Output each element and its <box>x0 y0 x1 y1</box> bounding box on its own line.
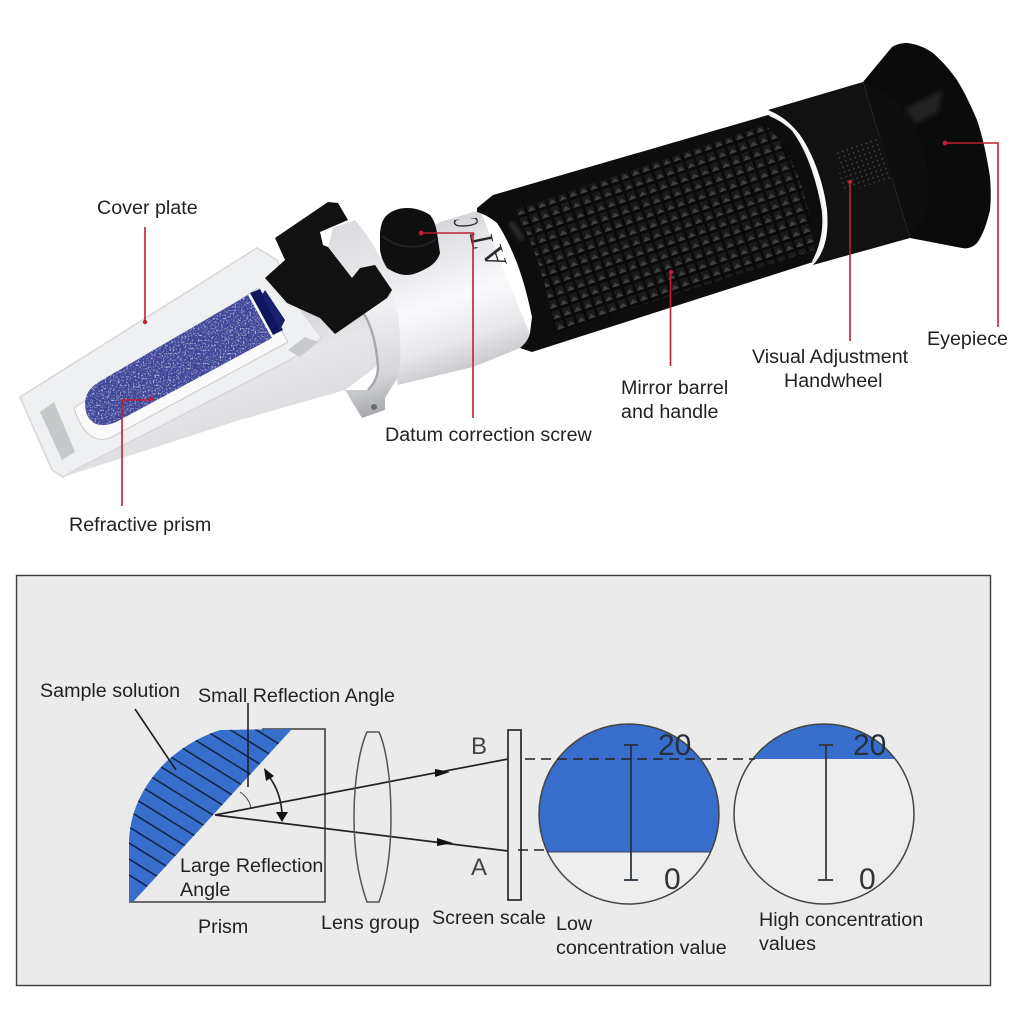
black clamp <box>265 202 392 334</box>
lens group <box>354 732 391 902</box>
light rays <box>215 759 508 851</box>
label: eyepiece: Eyepiece <box>927 328 1008 350</box>
adjusting knob <box>380 208 440 275</box>
silver collar ring <box>328 220 400 418</box>
eyepiece <box>863 43 991 248</box>
eyepiece highlight <box>905 90 943 124</box>
textured rubber grip <box>477 115 824 352</box>
large reflection angle label <box>180 855 323 901</box>
high concentration label <box>759 909 923 955</box>
high concentration label: High concentration <box>759 909 923 931</box>
small reflection leader line <box>247 703 249 787</box>
panel: working principle diagram <box>16 576 990 999</box>
low concentration label: Low <box>556 913 593 935</box>
cover glass details <box>288 337 318 357</box>
lens group label: Lens group <box>321 912 420 934</box>
high concentration label: values <box>759 933 816 955</box>
point A label: A <box>471 854 487 881</box>
white separator ring <box>770 115 824 262</box>
silver cone body <box>42 250 385 477</box>
label: mirror barrel and handle: Mirror barrel <box>621 377 728 399</box>
large reflection angle label: Angle <box>180 879 230 901</box>
inner white plate <box>74 288 288 439</box>
refractive prism <box>85 295 272 425</box>
screen scale <box>508 730 521 900</box>
low concentration view: 0 <box>664 863 681 896</box>
label: visual adjustment handwheel <box>752 180 909 392</box>
refractometer photo illustration <box>20 43 991 477</box>
ATC engraving: A <box>475 241 514 272</box>
label: refractive prism: Refractive prism <box>69 514 211 536</box>
label: cover plate <box>97 197 198 324</box>
label: mirror barrel and handle <box>621 270 728 423</box>
high concentration view: 20 <box>853 729 886 762</box>
large reflection angle label: Large Reflection <box>180 855 323 877</box>
label: visual adjustment handwheel: Handwheel <box>784 370 883 392</box>
sample solution leader line <box>135 709 176 770</box>
low concentration label <box>556 913 727 959</box>
prism outline <box>129 729 325 902</box>
transparent cover plate <box>20 248 322 477</box>
label: mirror barrel and handle: and handle <box>621 401 718 423</box>
dashed guide lines <box>518 759 755 850</box>
low concentration view <box>539 724 719 904</box>
navy prism end <box>262 290 285 330</box>
high concentration view: 0 <box>859 863 876 896</box>
large angle double arrow <box>264 768 288 822</box>
low concentration view: 20 <box>658 729 691 762</box>
label: visual adjustment handwheel: Visual Adjustment <box>752 346 909 368</box>
silver tube <box>372 210 532 385</box>
point B label: B <box>471 733 487 760</box>
prism label: Prism <box>198 916 248 938</box>
grey cover edge <box>40 402 75 460</box>
sample solution hatched area <box>129 729 292 902</box>
ATC engraving: C <box>446 216 486 229</box>
label: eyepiece <box>927 141 1008 350</box>
label: datum correction screw: Datum correction screw <box>385 424 593 446</box>
label: cover plate: Cover plate <box>97 197 198 219</box>
ATC engraving: T <box>463 228 502 251</box>
small angle arc <box>240 792 251 808</box>
low concentration label: concentration value <box>556 937 727 959</box>
visual adjustment handwheel <box>768 82 917 265</box>
ATC engraving <box>446 216 514 272</box>
small reflection angle label: Small Reflection Angle <box>198 685 395 707</box>
eyepiece neck <box>863 82 929 238</box>
high concentration view <box>734 724 914 904</box>
label: refractive prism <box>69 397 211 536</box>
screen scale label: Screen scale <box>432 907 546 929</box>
sample solution label: Sample solution <box>40 680 180 702</box>
dark blue window <box>250 289 283 335</box>
label: datum correction screw <box>385 231 593 446</box>
